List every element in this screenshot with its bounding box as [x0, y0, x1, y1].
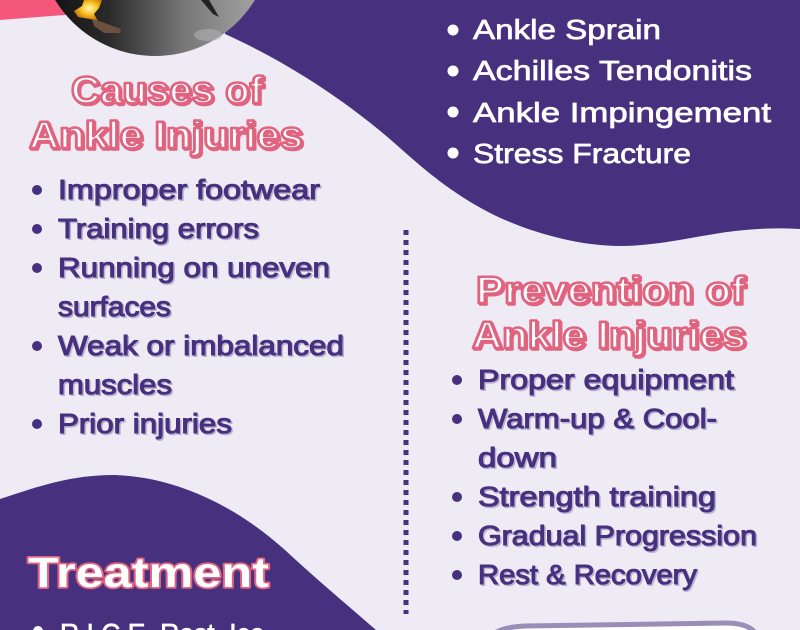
list: causes: Training errors	[60, 214, 260, 246]
heading: causes: Ankle Injuries	[29, 115, 303, 157]
purple wave top right	[225, 0, 800, 246]
heading: treatment: Treatment	[28, 549, 269, 597]
list: causes: Running on uneven	[58, 252, 330, 283]
purple wave bottom left	[0, 475, 376, 630]
pink corner shape	[0, 0, 90, 20]
list: prevention: Gradual Progression	[478, 520, 757, 551]
callout box	[487, 623, 762, 630]
heading: causes: Causes of	[71, 70, 263, 112]
list: causes: surfaces	[58, 291, 171, 322]
list: prevention: Warm-up & Cool-	[478, 403, 717, 434]
list: prevention: Strength training	[478, 481, 716, 512]
list: injury types: Achilles Tendonitis	[473, 55, 752, 86]
photo: ankle on grey circle	[38, 0, 272, 56]
heading: prevention: Ankle Injuries	[474, 316, 748, 358]
list: prevention: down	[480, 444, 558, 474]
heading: prevention: Ankle Injuries	[472, 315, 746, 357]
list: causes: Training errors	[58, 213, 259, 244]
heading: causes: Ankle Injuries	[30, 116, 304, 158]
list: causes: surfaces	[60, 292, 172, 324]
list: causes: Weak or imbalanced	[58, 330, 344, 361]
list: injury types: Ankle Impingement	[473, 97, 771, 128]
list: causes: muscles	[58, 369, 172, 400]
list: prevention	[452, 364, 758, 592]
list: prevention: down	[478, 442, 557, 473]
highlight on circle	[194, 29, 222, 41]
list: injury types	[448, 14, 771, 169]
heading: prevention	[472, 270, 748, 358]
heading: causes	[29, 70, 304, 158]
list: causes: Weak or imbalanced	[60, 332, 346, 362]
list: prevention: Rest & Recovery	[478, 559, 697, 590]
list: causes: muscles	[60, 370, 174, 402]
list: causes: Improper footwear	[60, 176, 322, 206]
list: injury types: Stress Fracture	[473, 138, 691, 169]
list: prevention: Gradual Progression	[480, 522, 758, 552]
heading: prevention: Prevention of	[476, 270, 745, 312]
list: causes	[32, 174, 346, 440]
list: causes: Prior injuries	[58, 408, 232, 439]
heading: prevention: Prevention of	[478, 272, 747, 314]
icon: dark mark	[201, 0, 219, 17]
icon: glowing ankle	[74, 0, 121, 33]
list: injury types: Ankle Sprain	[473, 14, 661, 45]
list: prevention: Strength training	[480, 482, 718, 514]
list: prevention: Rest & Recovery	[480, 560, 698, 592]
list: causes: Improper footwear	[58, 174, 320, 205]
list: causes: Prior injuries	[60, 410, 234, 440]
list: prevention: Proper equipment	[480, 366, 736, 396]
list: prevention: Warm-up & Cool-	[480, 404, 718, 436]
dotted divider	[404, 230, 408, 614]
heading: causes: Causes of	[72, 72, 265, 114]
list: prevention: Proper equipment	[478, 364, 734, 395]
list: causes: Running on uneven	[60, 254, 332, 284]
